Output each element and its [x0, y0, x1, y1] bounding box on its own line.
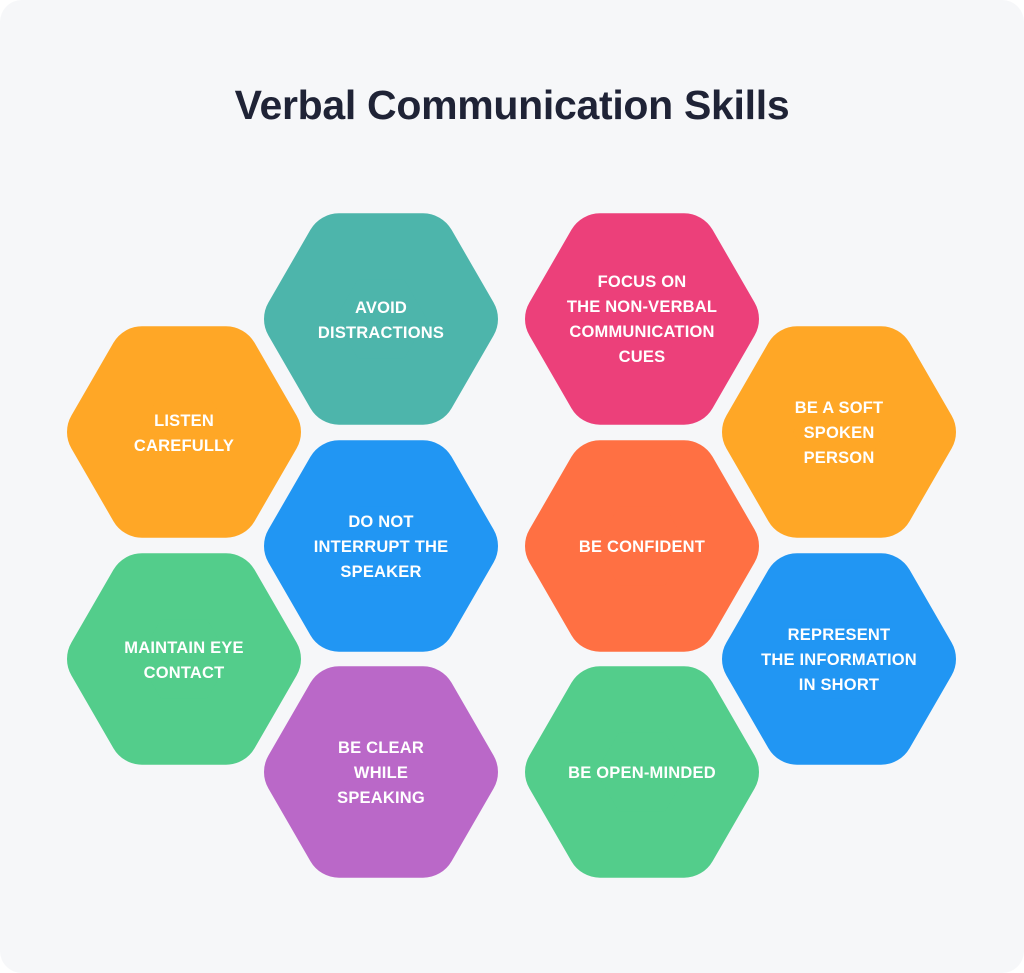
hexagon: do not interrupt: DO NOT: [348, 513, 414, 531]
hexagon: focus on non-verbal cues: CUES: [619, 348, 665, 366]
hexagon: be open-minded: [558, 699, 726, 845]
hexagon: maintain eye contact: MAINTAIN EYE: [124, 639, 244, 657]
hexagon: be a soft spoken person: [755, 359, 923, 505]
hexagon: focus on non-verbal cues: FOCUS ON: [598, 273, 686, 291]
hexagon: represent information in short: IN SHORT: [799, 676, 879, 694]
hexagon: listen carefully: LISTEN: [154, 412, 214, 430]
hexagon: be a soft spoken person: SPOKEN: [804, 424, 874, 442]
hexagon: be clear while speaking: [297, 699, 465, 845]
hexagon: be clear while speaking: BE CLEAR: [338, 739, 424, 757]
hexagon: be confident: [558, 473, 726, 619]
hexagon: avoid distractions: DISTRACTIONS: [318, 324, 444, 342]
hexagon: listen carefully: [100, 359, 268, 505]
title: Verbal Communication Skills: [235, 82, 789, 128]
hexagon: do not interrupt: SPEAKER: [340, 563, 422, 581]
hexagon: focus on non-verbal cues: THE NON-VERBAL: [567, 298, 717, 316]
hexagon: do not interrupt: [297, 473, 465, 619]
hexagon: do not interrupt: INTERRUPT THE: [314, 538, 448, 556]
hexagon: represent information in short: REPRESENT: [788, 626, 890, 644]
hexagon: maintain eye contact: [100, 586, 268, 732]
hexagon: represent information in short: THE INFORMATION: [761, 651, 917, 669]
hexagon: represent information in short: [755, 586, 923, 732]
hexagon: be a soft spoken person: PERSON: [804, 449, 874, 467]
hexagon: be clear while speaking: WHILE: [354, 764, 408, 782]
hexagon: listen carefully: CAREFULLY: [134, 437, 234, 455]
hexagon: be a soft spoken person: BE A SOFT: [795, 399, 883, 417]
hexagon: be clear while speaking: SPEAKING: [337, 789, 425, 807]
hexagon: focus on non-verbal cues: COMMUNICATION: [569, 323, 715, 341]
hexagon: avoid distractions: AVOID: [355, 299, 407, 317]
hexagon: focus on non-verbal cues: [558, 246, 726, 392]
hexagon: avoid distractions: [297, 246, 465, 392]
hexagon: maintain eye contact: CONTACT: [144, 664, 224, 682]
hexagon: be confident: BE CONFIDENT: [579, 538, 705, 556]
hexagon: be open-minded: BE OPEN-MINDED: [568, 764, 716, 782]
